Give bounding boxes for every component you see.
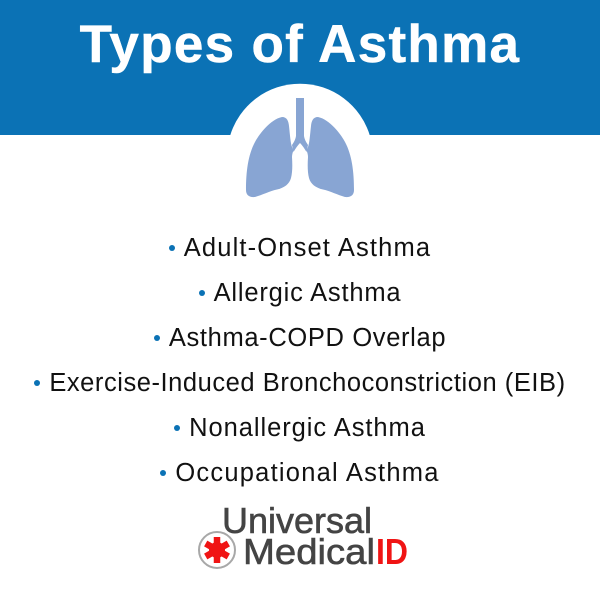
logo text: [222, 500, 408, 572]
logo text: Medical: [243, 531, 375, 572]
header banner: [0, 0, 600, 135]
title: Types of Asthma: [80, 15, 520, 74]
list item: Occupational Asthma: [175, 459, 440, 487]
logo: Universal Medical ID: [198, 503, 408, 572]
list item: Adult-Onset Asthma: [184, 234, 431, 262]
list item: Allergic Asthma: [214, 279, 401, 307]
list item: Nonallergic Asthma: [189, 414, 426, 442]
logo emblem: [199, 532, 235, 568]
list item: Exercise-Induced Bronchoconstriction (EIB): [49, 369, 566, 397]
list item: Asthma-COPD Overlap: [169, 324, 446, 352]
icon: lungs in white semicircle: [230, 84, 370, 198]
list of asthma types: [34, 234, 566, 487]
logo text: ID: [376, 531, 408, 572]
